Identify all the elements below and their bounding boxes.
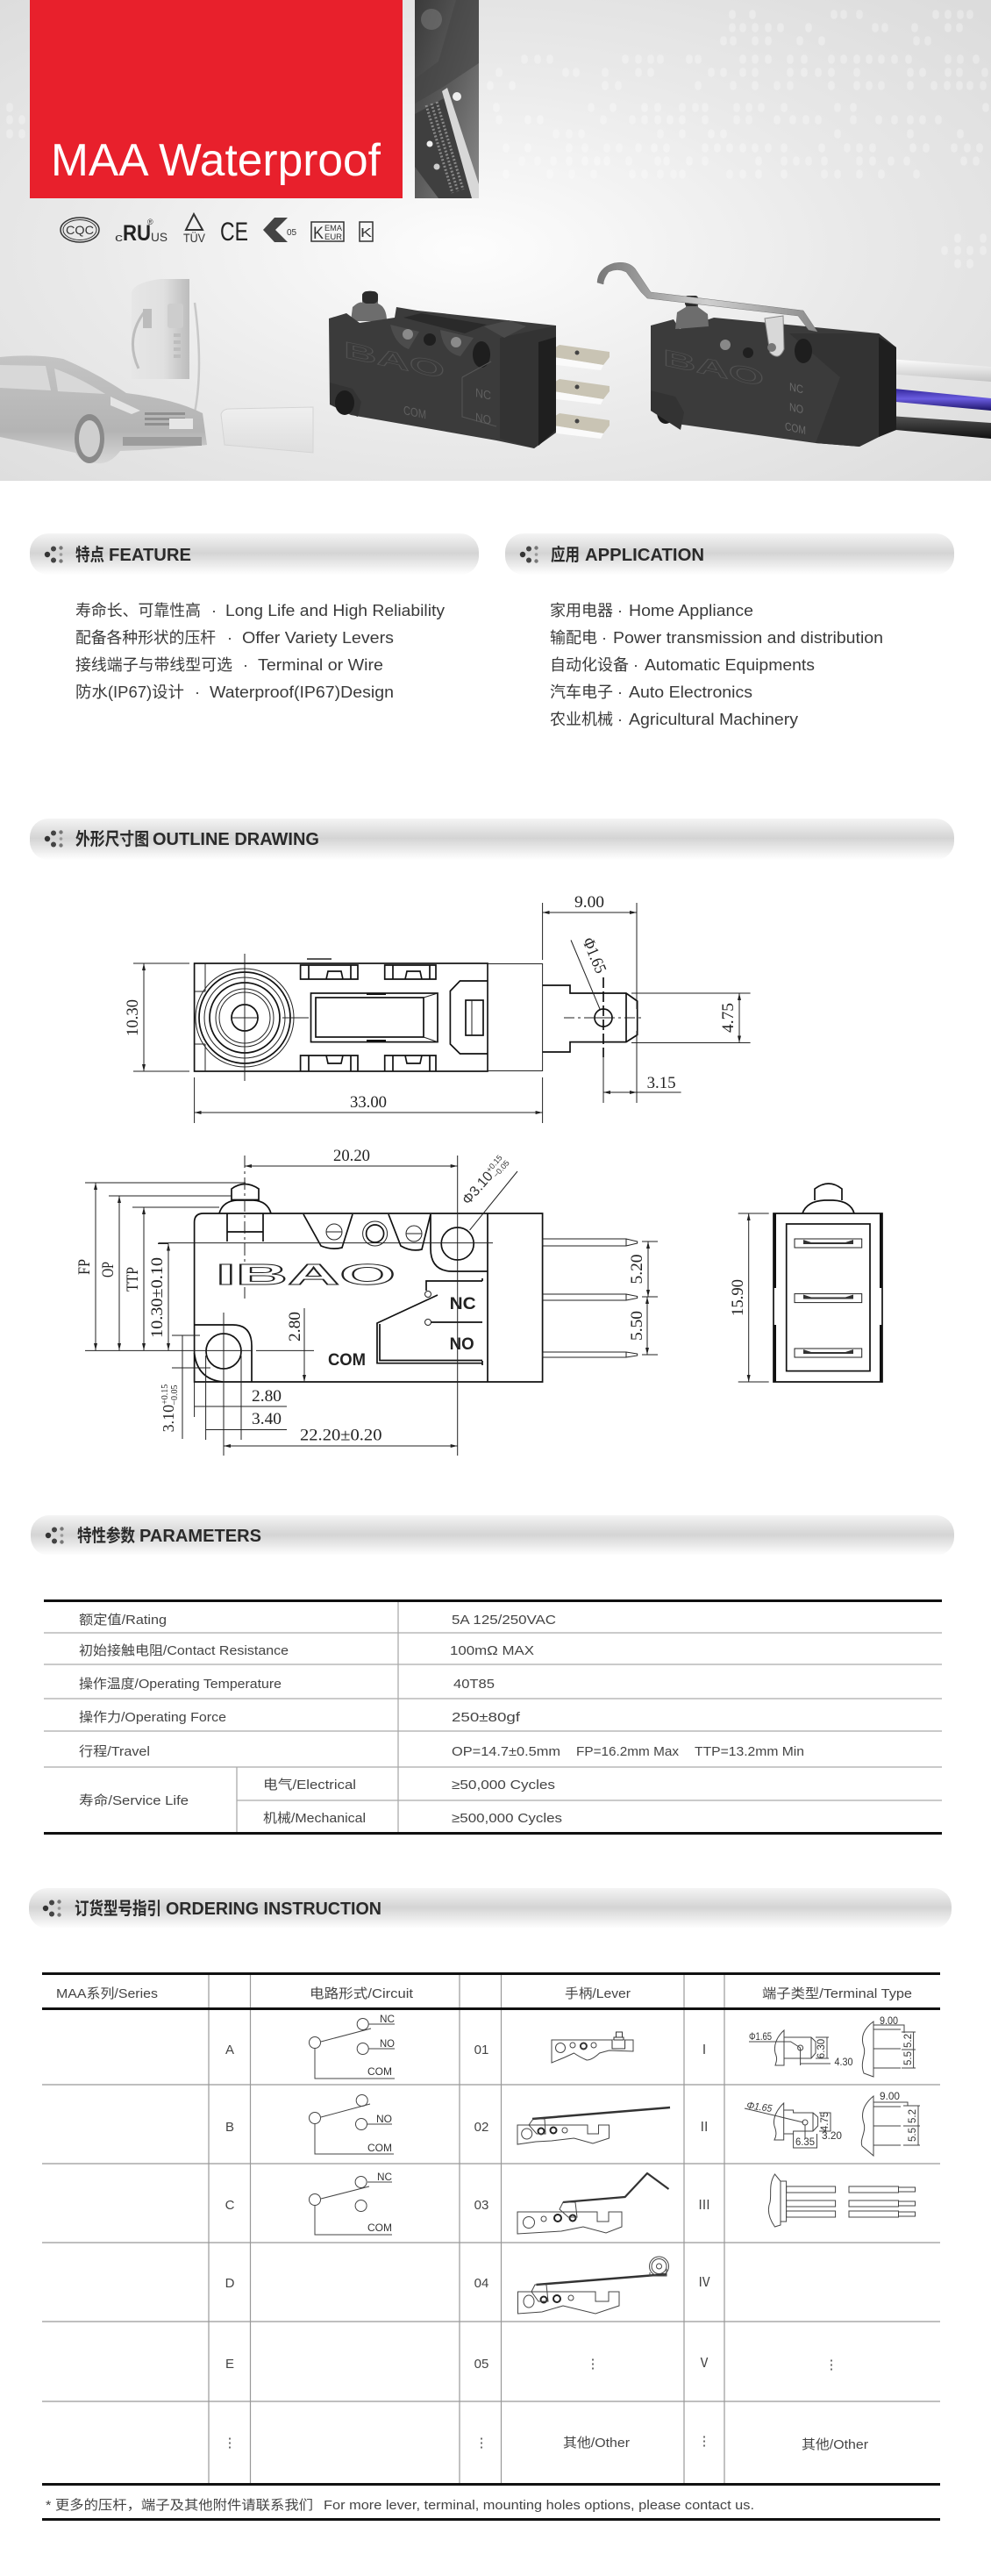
terminal type I: 5.2	[903, 2034, 914, 2048]
section header: parameters: 特性参数	[77, 1525, 135, 1546]
circuit C: COM	[367, 2223, 392, 2234]
application list: 汽车电子	[550, 683, 613, 701]
dimensions FP OP TTP: OP	[99, 1262, 118, 1277]
table header	[56, 1986, 912, 2001]
footnote: * 更多的压杆，端子及其他附件请联系我们	[46, 2498, 313, 2513]
dimensions 2.80 and 3.40	[195, 1387, 287, 1430]
dimension 2.80 vertical	[286, 1308, 304, 1382]
ENEC mark	[263, 218, 297, 242]
circuit B	[309, 2095, 394, 2154]
table header: 端子类型/Terminal Type	[762, 1986, 912, 2001]
lever codes: 03	[474, 2198, 488, 2213]
lever codes: 01	[474, 2043, 488, 2057]
ENEC mark: 05	[287, 228, 297, 238]
circuit symbol	[328, 1278, 482, 1370]
terminal type I: 6.30	[816, 2039, 827, 2058]
dimensions 5.20 and 5.50: 5.20	[628, 1255, 646, 1284]
feature list: ·	[227, 629, 232, 647]
row: operating temperature	[79, 1677, 495, 1692]
UL mark: RU	[123, 221, 151, 246]
application list: Power transmission and distribution	[613, 629, 883, 647]
row: contact resistance	[79, 1643, 534, 1658]
product photo: terminal switch: COM	[403, 403, 426, 421]
row: rating: 5A 125/250VAC	[452, 1613, 556, 1628]
drawing: top view	[124, 893, 751, 1123]
terminal type II: 5.2	[908, 2109, 918, 2123]
terminal type I: 4.30	[835, 2057, 852, 2068]
dimension 3.15	[603, 1031, 681, 1103]
section header: feature: FEATURE	[109, 546, 191, 565]
dimensions 2.80 and 3.40: 3.40	[252, 1410, 282, 1428]
section header: outline drawing	[30, 819, 954, 860]
dimension 15.90: 15.90	[729, 1279, 747, 1316]
feature list: ·	[211, 602, 217, 619]
dimensions FP OP TTP: 10.30±0.10	[148, 1257, 167, 1338]
dimensions 5.20 and 5.50	[628, 1241, 658, 1355]
dimensions FP OP TTP	[75, 1183, 246, 1350]
row: operating force	[79, 1710, 521, 1725]
row: service life: 机械/Mechanical	[263, 1811, 366, 1826]
logo: IBAO	[216, 1258, 396, 1291]
ordering table	[42, 1972, 940, 2521]
hero banner	[0, 0, 991, 481]
product photo: terminal switch: NO	[475, 410, 491, 427]
feature list: Terminal or Wire	[258, 656, 383, 674]
row: operating force: 250±80gf	[452, 1710, 521, 1725]
application list: Automatic Equipments	[645, 656, 815, 674]
circuit board photo	[415, 0, 479, 198]
dimension 22.20: 22.20±0.20	[300, 1427, 382, 1445]
KEMA mark: K	[313, 225, 324, 243]
row: operating temperature: 40T85	[453, 1677, 495, 1692]
application list: 农业机械	[550, 711, 613, 728]
product photo: terminal switch	[329, 291, 610, 448]
code letters: C	[225, 2198, 235, 2213]
terminal codes: ⋮	[698, 2434, 710, 2449]
application list: ·	[602, 629, 607, 647]
section header: application	[505, 533, 954, 575]
dimensions 5.20 and 5.50: 5.50	[628, 1311, 646, 1341]
footnote: For more lever, terminal, mounting holes options, please contact us.	[324, 2498, 754, 2513]
dimension 4.75	[631, 993, 751, 1042]
section header: application: APPLICATION	[585, 546, 704, 565]
terminal	[543, 977, 643, 1103]
ghost image: appliance	[221, 407, 313, 453]
feature list	[75, 602, 445, 701]
CQC mark	[61, 218, 99, 242]
lever 03	[517, 2173, 668, 2234]
terminal other: 其他/Other	[802, 2437, 868, 2452]
terminal type II: Φ1.65	[746, 2100, 774, 2114]
lever other: 其他/Other	[563, 2436, 630, 2451]
housing outline	[195, 1213, 543, 1382]
circuit A: NC	[380, 2014, 395, 2025]
dimension mounting hole 3.10: −0.05	[491, 1158, 511, 1179]
plunger	[675, 298, 709, 329]
dimension 10.30: 10.30	[124, 999, 142, 1036]
application list: Agricultural Machinery	[629, 711, 798, 728]
terminal slots	[795, 1239, 862, 1357]
product photo: wire switch with lever: COM	[785, 419, 806, 437]
code letters: D	[225, 2276, 235, 2291]
code letters: A	[225, 2043, 234, 2057]
code letters: B	[225, 2120, 234, 2135]
feature list: Waterproof(IP67)Design	[210, 683, 394, 701]
lever codes: ⋮	[475, 2436, 488, 2451]
row: service life	[79, 1778, 562, 1826]
application list: ·	[617, 711, 623, 728]
section header: ordering instruction: ORDERING INSTRUCTION	[166, 1900, 381, 1919]
row: contact resistance: 初始接触电阻/Contact Resistance	[79, 1643, 289, 1658]
table rules	[42, 1975, 940, 2483]
dimension 9.00	[543, 893, 637, 1009]
product photo: terminal switch: NC	[475, 385, 491, 403]
section header: parameters	[31, 1515, 954, 1556]
row: travel: TTP=13.2mm Min	[695, 1744, 804, 1759]
row: operating temperature: 操作温度/Operating Temperature	[79, 1677, 282, 1692]
dimension 2.80 vertical: 2.80	[286, 1312, 304, 1342]
dimension hole 3.10 tolerance: −0.05	[170, 1385, 180, 1406]
application list: Home Appliance	[629, 602, 753, 619]
hero background	[0, 0, 991, 481]
circuit C: NC	[377, 2172, 392, 2183]
dimension 15.90	[729, 1213, 769, 1382]
section header: feature	[30, 533, 479, 575]
row: rating	[79, 1613, 556, 1628]
TUV mark: TÜV	[183, 230, 206, 245]
dimension mounting hole 3.10	[459, 1153, 517, 1230]
row: travel: 行程/Travel	[79, 1744, 150, 1759]
product photo: wire switch with lever: BAO	[663, 344, 764, 391]
KEMA mark: EMA	[324, 224, 342, 233]
section header: ordering instruction: 订货型号指引	[75, 1898, 161, 1919]
terminal codes	[697, 2043, 711, 2449]
dimension hole 3.10 tolerance: +0.15	[160, 1385, 170, 1405]
feature list: 防水(IP67)设计	[75, 683, 184, 701]
lever codes: 05	[474, 2357, 488, 2372]
drawing: side view	[75, 1147, 658, 1456]
code letters: ⋮	[223, 2436, 237, 2451]
feature list: 接线端子与带线型可选	[75, 656, 232, 674]
CE mark: CE	[220, 218, 248, 247]
row: operating force: 操作力/Operating Force	[79, 1710, 226, 1725]
terminal type I: Φ1.65	[749, 2032, 772, 2043]
terminal type II	[745, 2092, 920, 2156]
circuit A	[309, 2014, 395, 2079]
dimension 33.00	[195, 1077, 543, 1123]
lever 04	[517, 2257, 668, 2314]
circuit B: NO	[376, 2114, 392, 2125]
terminal type I	[749, 2016, 916, 2077]
section header: feature: 特点	[75, 545, 104, 565]
dimension 33.00: 33.00	[350, 1093, 387, 1112]
row: service life: 电气/Electrical	[263, 1778, 356, 1792]
product photo: wire switch with lever	[597, 262, 991, 447]
section header: outline drawing: 外形尺寸图	[75, 829, 149, 849]
dimension 9.00: 9.00	[574, 893, 604, 912]
plunger	[351, 291, 387, 321]
UL mark: US	[151, 230, 168, 244]
application list: 输配电	[550, 629, 597, 647]
terminal type II: 3.20	[822, 2131, 842, 2142]
row: contact resistance: 100mΩ MAX	[450, 1643, 534, 1658]
application list	[550, 602, 883, 728]
feature list: Long Life and High Reliability	[225, 602, 445, 619]
circuit symbol: COM	[328, 1351, 366, 1370]
application list: ·	[633, 656, 638, 674]
drawing: end view	[729, 1184, 882, 1382]
product photo: wire switch with lever: NC	[789, 380, 803, 396]
table header: 手柄/Lever	[565, 1986, 631, 2001]
section header: application: 应用	[551, 544, 580, 565]
UL mark	[115, 218, 168, 246]
code letters	[223, 2043, 237, 2451]
lever codes: 02	[474, 2120, 488, 2135]
housing	[651, 318, 896, 447]
terminal codes: Ⅰ	[697, 2043, 711, 2057]
housing outline	[195, 954, 543, 1081]
circuit A: COM	[367, 2067, 392, 2078]
section header: parameters: PARAMETERS	[139, 1527, 261, 1546]
KC mark: K	[360, 225, 372, 240]
certification marks	[61, 214, 373, 247]
terminals	[542, 345, 610, 439]
background dot texture	[10, 13, 986, 265]
terminal codes: Ⅲ	[697, 2198, 711, 2213]
lever 02	[517, 2107, 670, 2144]
terminals	[543, 1239, 638, 1357]
KC mark	[360, 222, 373, 241]
KEMA mark: EUR	[324, 233, 343, 241]
ghost image: car	[0, 355, 207, 463]
terminal type III	[768, 2174, 916, 2227]
feature list: ·	[243, 656, 248, 674]
row: rating: 额定值/Rating	[79, 1613, 167, 1628]
circuit symbol: NO	[450, 1335, 474, 1354]
title text: MAA Waterproof	[51, 135, 381, 186]
dimension hole diameter 1.65: Φ1.65	[578, 935, 610, 977]
dimensions 2.80 and 3.40: 2.80	[252, 1387, 282, 1406]
dimensions FP OP TTP: TTP	[124, 1267, 142, 1292]
circuit A: NO	[380, 2039, 395, 2050]
KEMA mark	[311, 222, 344, 243]
terminal type II: 9.00	[880, 2092, 900, 2102]
terminal codes: Ⅴ	[697, 2356, 711, 2371]
axis lines	[85, 1156, 493, 1456]
dimension mounting hole 3.10: Φ3.10	[460, 1169, 496, 1208]
row: travel	[79, 1744, 804, 1759]
footnote	[46, 2498, 754, 2513]
terminal more: ⋮	[824, 2358, 838, 2372]
row: travel: OP=14.7±0.5mm	[452, 1744, 560, 1759]
lever 01	[552, 2032, 633, 2063]
CQC mark: CQC	[66, 223, 94, 237]
dimension 3.15: 3.15	[647, 1074, 676, 1092]
table header: MAA系列/Series	[56, 1986, 158, 2001]
table rules	[44, 1602, 942, 1832]
lever more: ⋮	[586, 2357, 600, 2372]
section header: ordering instruction	[29, 1888, 952, 1928]
feature list: 配备各种形状的压杆	[75, 629, 216, 647]
UL mark: c	[115, 231, 124, 244]
lever	[597, 262, 817, 332]
application list: 家用电器	[550, 602, 613, 619]
row: travel: FP=16.2mm Max	[576, 1744, 680, 1759]
lever codes	[474, 2043, 488, 2451]
feature list: Offer Variety Levers	[242, 629, 394, 647]
application list: Auto Electronics	[629, 683, 752, 701]
terminal codes: Ⅳ	[697, 2275, 711, 2290]
wires	[877, 358, 991, 439]
row: service life: ≥500,000 Cycles	[452, 1811, 562, 1826]
parameters table	[44, 1599, 942, 1835]
circuit symbol: NC	[450, 1295, 476, 1313]
ghost image: EV charger	[132, 279, 199, 412]
application list: 自动化设备	[550, 656, 629, 674]
circuit B: COM	[367, 2143, 392, 2154]
terminal type II: 5.5	[908, 2128, 918, 2142]
terminal type II: 4.75	[820, 2112, 831, 2131]
row: service life: ≥50,000 Cycles	[452, 1778, 555, 1792]
circuit C	[309, 2172, 392, 2235]
terminal type II: 6.35	[795, 2137, 815, 2148]
UL mark: ®	[147, 218, 153, 226]
product photo: terminal switch: BAO	[344, 336, 445, 383]
terminal type I: 5.5	[903, 2051, 914, 2065]
housing	[329, 307, 556, 448]
row: service life: 寿命/Service Life	[79, 1792, 189, 1808]
dimension hole 3.10 tolerance	[160, 1335, 182, 1439]
plunger	[219, 1156, 271, 1299]
terminal type I: 9.00	[880, 2016, 898, 2027]
TUV mark	[183, 214, 206, 245]
dimensions FP OP TTP: FP	[75, 1259, 94, 1275]
application list: ·	[617, 683, 623, 701]
section header: outline drawing: OUTLINE DRAWING	[153, 830, 319, 849]
terminal codes: Ⅱ	[697, 2120, 711, 2135]
lever codes: 04	[474, 2276, 488, 2291]
table header: 电路形式/Circuit	[310, 1986, 414, 2001]
dimension 20.20: 20.20	[333, 1147, 370, 1165]
feature list: 寿命长、可靠性高	[75, 602, 201, 619]
dimension mounting hole 3.10: +0.15	[484, 1153, 504, 1174]
dimension hole diameter 1.65	[571, 935, 610, 1009]
dimension 4.75: 4.75	[719, 1003, 738, 1033]
product tile: title	[30, 0, 403, 198]
dimension 10.30	[124, 963, 189, 1071]
dimension hole 3.10 tolerance: 3.10	[160, 1405, 177, 1432]
product photo: wire switch with lever: NO	[789, 400, 803, 416]
feature list: ·	[195, 683, 200, 701]
code letters: E	[225, 2357, 234, 2372]
application list: ·	[617, 602, 623, 619]
